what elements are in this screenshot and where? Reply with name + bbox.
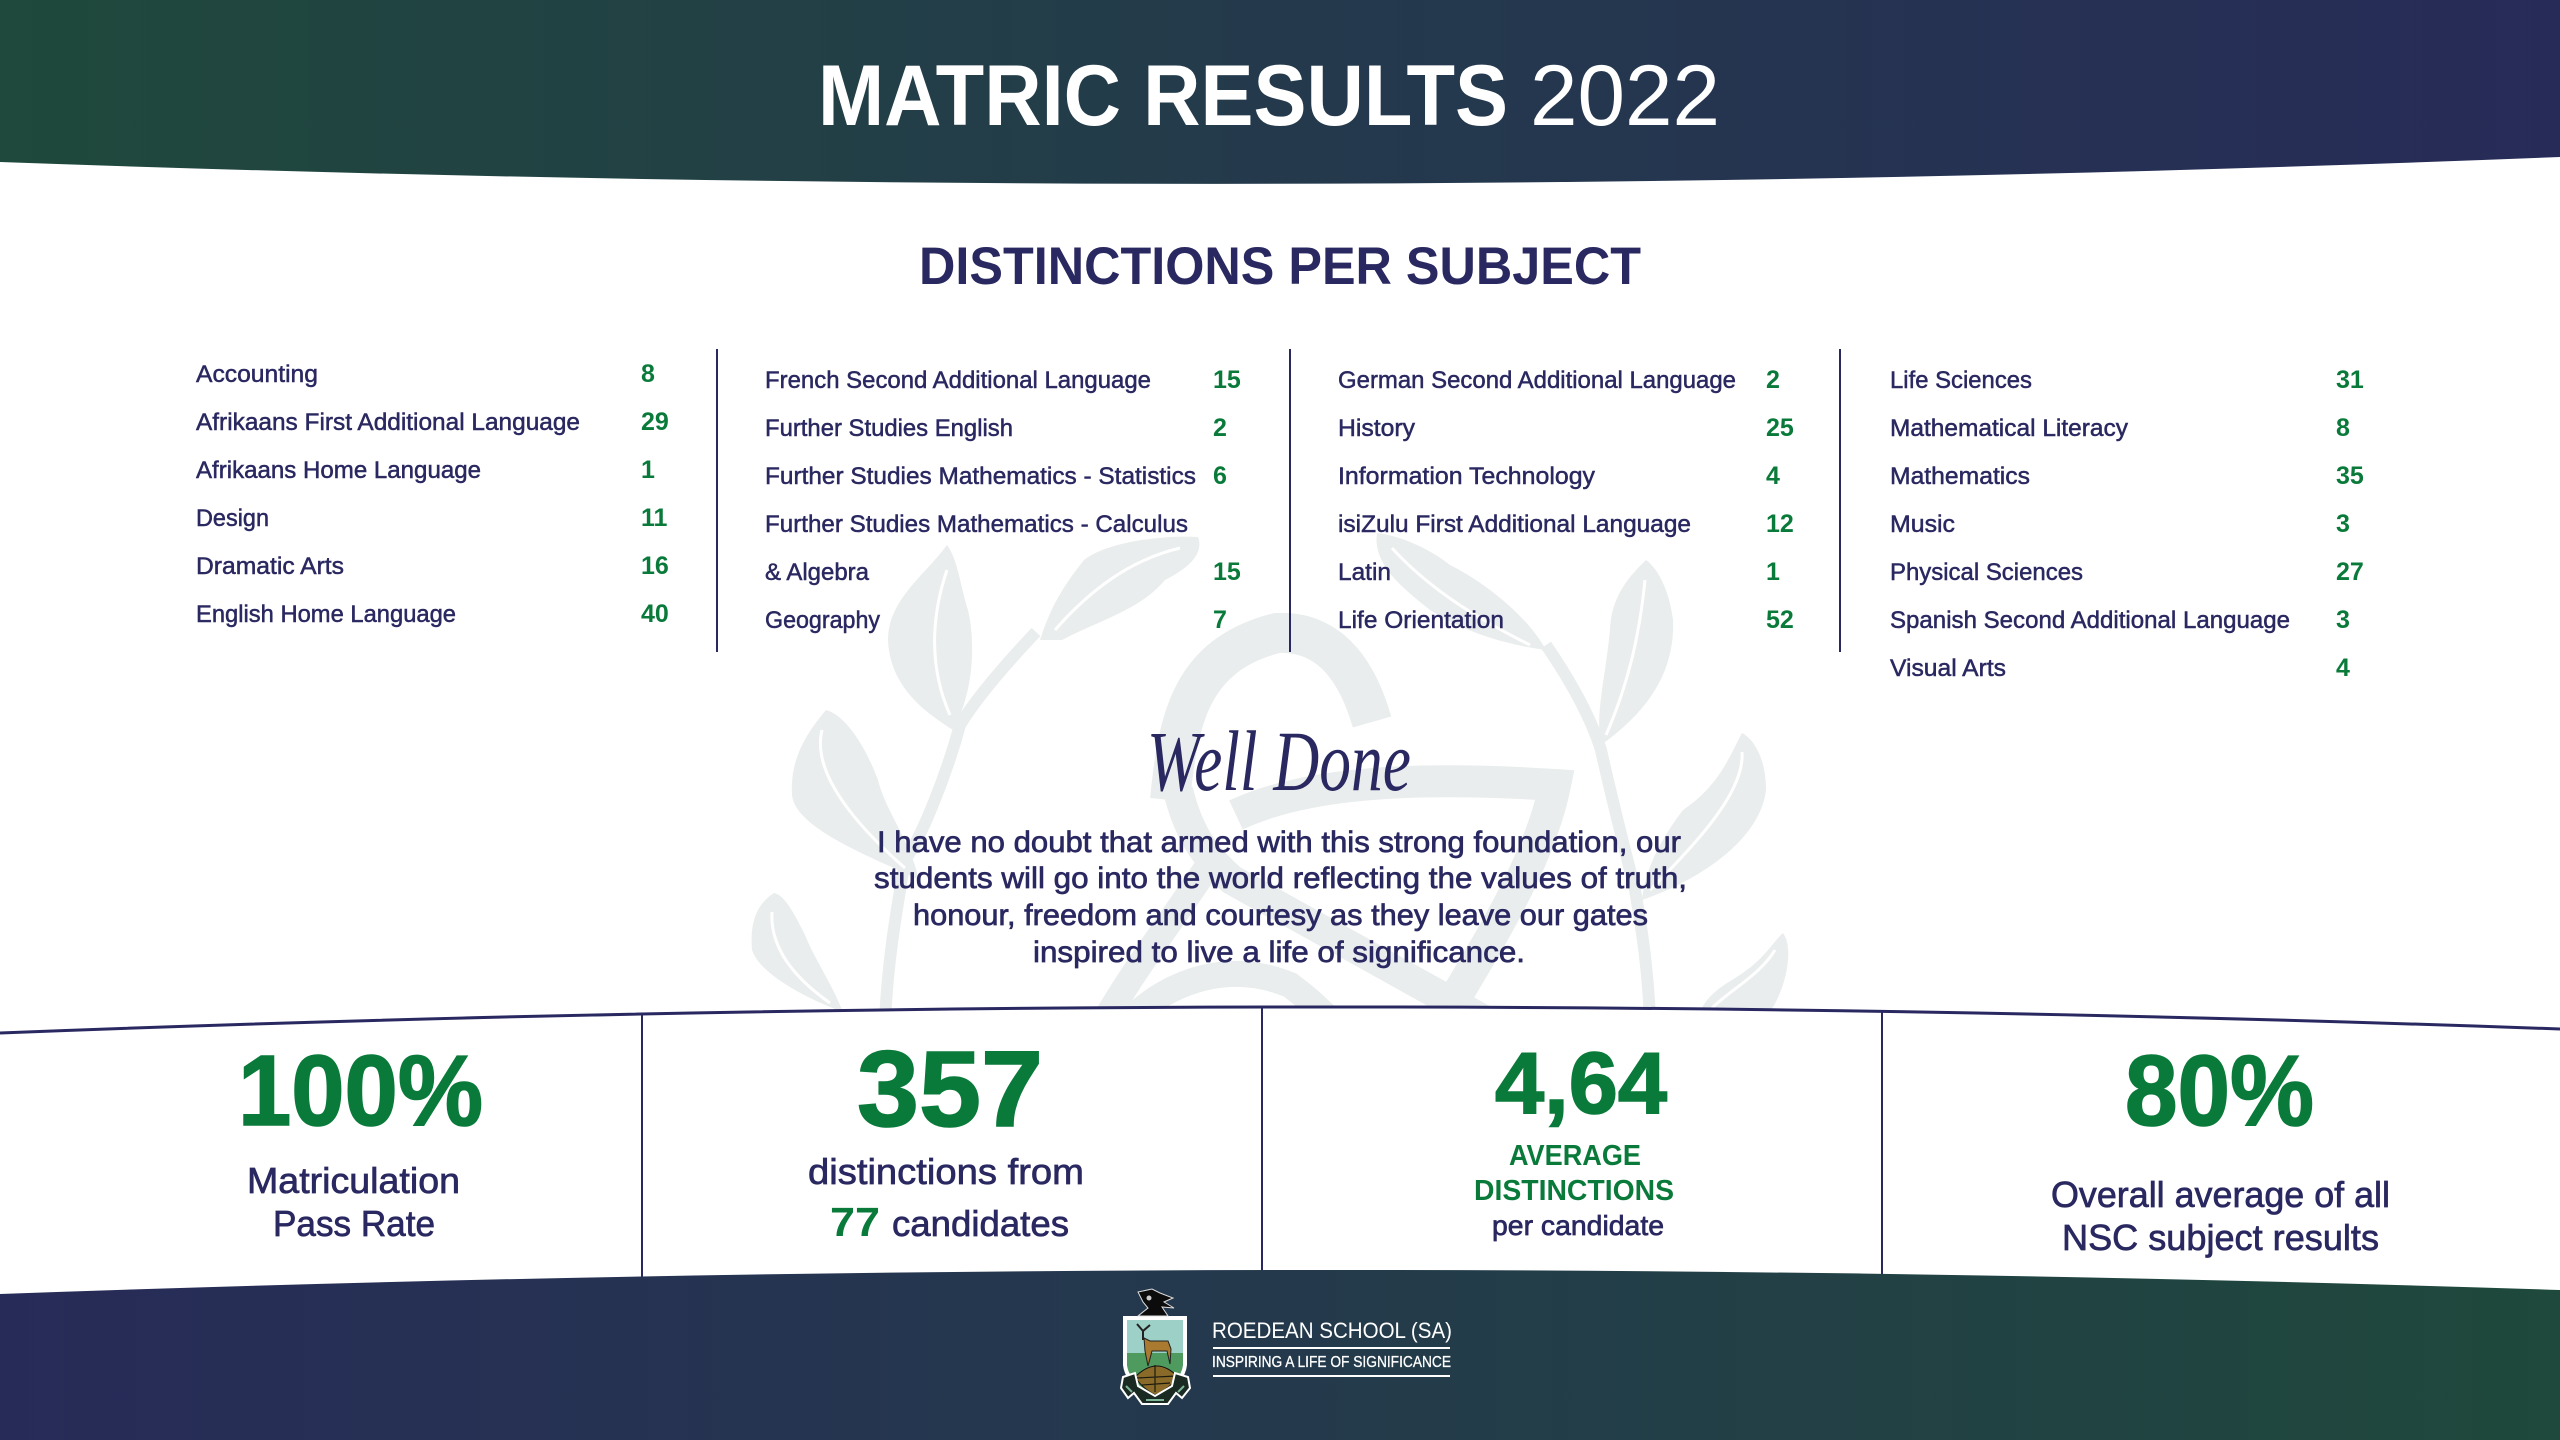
footer banner [0, 1270, 2560, 1440]
subject column 4: 27 [2336, 558, 2364, 586]
icon: school crest [1121, 1289, 1190, 1404]
subject column 3: isiZulu First Additional Language [1338, 511, 1691, 538]
stat: pass rate [238, 1035, 483, 1244]
subject column 3: Information Technology [1338, 463, 1596, 490]
heading: distinctions per subject: DISTINCTIONS PER SUBJECT [919, 237, 1641, 296]
subject column 3: 2 [1766, 366, 1780, 394]
well done script heading: Well Done [1147, 713, 1411, 809]
subject column 4: Mathematics [1890, 463, 2030, 490]
subject column 4: 31 [2336, 366, 2364, 394]
message paragraph: students will go into the world reflecting the values of truth, [874, 862, 1687, 895]
stat: pass rate: Matriculation [247, 1160, 460, 1201]
subject column 4: 35 [2336, 462, 2364, 490]
stat: overall average: 80% [2125, 1035, 2314, 1147]
subject column 4 [1890, 366, 2364, 682]
subject column 4: Physical Sciences [1890, 559, 2083, 586]
subject column 4: Visual Arts [1890, 655, 2006, 682]
subject column 3: 25 [1766, 414, 1794, 442]
subject column 2: 6 [1213, 462, 1227, 490]
subject column 3: 52 [1766, 606, 1794, 634]
subject column 2: Further Studies Mathematics - Calculus [765, 511, 1188, 538]
message paragraph: I have no doubt that armed with this strong foundation, our [877, 826, 1681, 859]
subject column 2: Further Studies English [765, 415, 1013, 442]
subject column 2: 15 [1213, 558, 1241, 586]
subject column 4: Spanish Second Additional Language [1890, 607, 2290, 634]
stat: distinctions: distinctions from [808, 1151, 1084, 1192]
stat: average distinctions: 4,64 [1495, 1035, 1667, 1132]
title: 2022 [1530, 48, 1720, 144]
stat: distinctions: 357 [857, 1028, 1043, 1149]
stat: pass rate: 100% [238, 1035, 483, 1147]
message paragraph [874, 826, 1687, 969]
subject column 1: 1 [641, 456, 655, 484]
subject column 3: 12 [1766, 510, 1794, 538]
subject column 4: 8 [2336, 414, 2350, 442]
message paragraph: honour, freedom and courtesy as they leave our gates [913, 899, 1648, 932]
subject column 3 [1338, 366, 1794, 634]
subject column 4: Life Sciences [1890, 367, 2032, 394]
stat: average distinctions [1474, 1035, 1674, 1241]
subject column 1: Afrikaans First Additional Language [196, 409, 580, 436]
subject column 2: 2 [1213, 414, 1227, 442]
subject column 3: Life Orientation [1338, 607, 1504, 634]
subject column 4: 3 [2336, 510, 2350, 538]
subject column 1: 16 [641, 552, 669, 580]
school name lockup: INSPIRING A LIFE OF SIGNIFICANCE [1212, 1354, 1451, 1371]
subject column 3: History [1338, 415, 1416, 442]
stat: overall average: Overall average of all [2051, 1174, 2390, 1215]
subject column 4: 3 [2336, 606, 2350, 634]
subject column 1: 11 [641, 504, 668, 532]
stat: distinctions: candidates [892, 1203, 1069, 1244]
subject column 4: Mathematical Literacy [1890, 415, 2129, 442]
subject column 1: Design [196, 505, 269, 532]
subject column 4: 4 [2336, 654, 2350, 682]
school name lockup [1212, 1318, 1452, 1377]
subject column 2: 15 [1213, 366, 1241, 394]
stat: distinctions [808, 1028, 1084, 1245]
stat: overall average [2051, 1035, 2390, 1258]
school name lockup: ROEDEAN SCHOOL (SA) [1212, 1318, 1452, 1343]
subject column 2: Further Studies Mathematics - Statistics [765, 463, 1196, 490]
subject column 2: & Algebra [765, 559, 869, 586]
subject column 2: Geography [765, 607, 881, 634]
subject column 1: Afrikaans Home Language [196, 457, 481, 484]
header banner [0, 0, 2560, 184]
stat: pass rate: Pass Rate [273, 1203, 435, 1244]
stats band [0, 1007, 2560, 1300]
watermark: school crest with leaves [752, 533, 1788, 1020]
subject column 3: Latin [1338, 559, 1391, 586]
stat: distinctions: 77 [830, 1199, 880, 1245]
subject column 2 [765, 366, 1241, 634]
subject column 4: Music [1890, 511, 1955, 538]
subject column 1: Accounting [196, 361, 318, 388]
subject column 3: German Second Additional Language [1338, 367, 1736, 394]
subject column 1: English Home Language [196, 601, 456, 628]
subject column 1: 8 [641, 360, 655, 388]
subject column 3: 4 [1766, 462, 1780, 490]
title: MATRIC RESULTS [818, 48, 1508, 144]
stat: average distinctions: per candidate [1492, 1210, 1664, 1241]
message paragraph: inspired to live a life of significance. [1033, 936, 1525, 969]
subject column 1: 40 [641, 600, 669, 628]
stat: overall average: NSC subject results [2062, 1217, 2379, 1258]
stat: average distinctions: AVERAGE [1509, 1140, 1641, 1172]
subject column 1: Dramatic Arts [196, 553, 344, 580]
subject column 1: 29 [641, 408, 669, 436]
subject column 2: French Second Additional Language [765, 367, 1151, 394]
subject column 3: 1 [1766, 558, 1780, 586]
stat: average distinctions: DISTINCTIONS [1474, 1175, 1674, 1207]
subject column 1 [196, 360, 669, 628]
subject column 2: 7 [1213, 606, 1227, 634]
